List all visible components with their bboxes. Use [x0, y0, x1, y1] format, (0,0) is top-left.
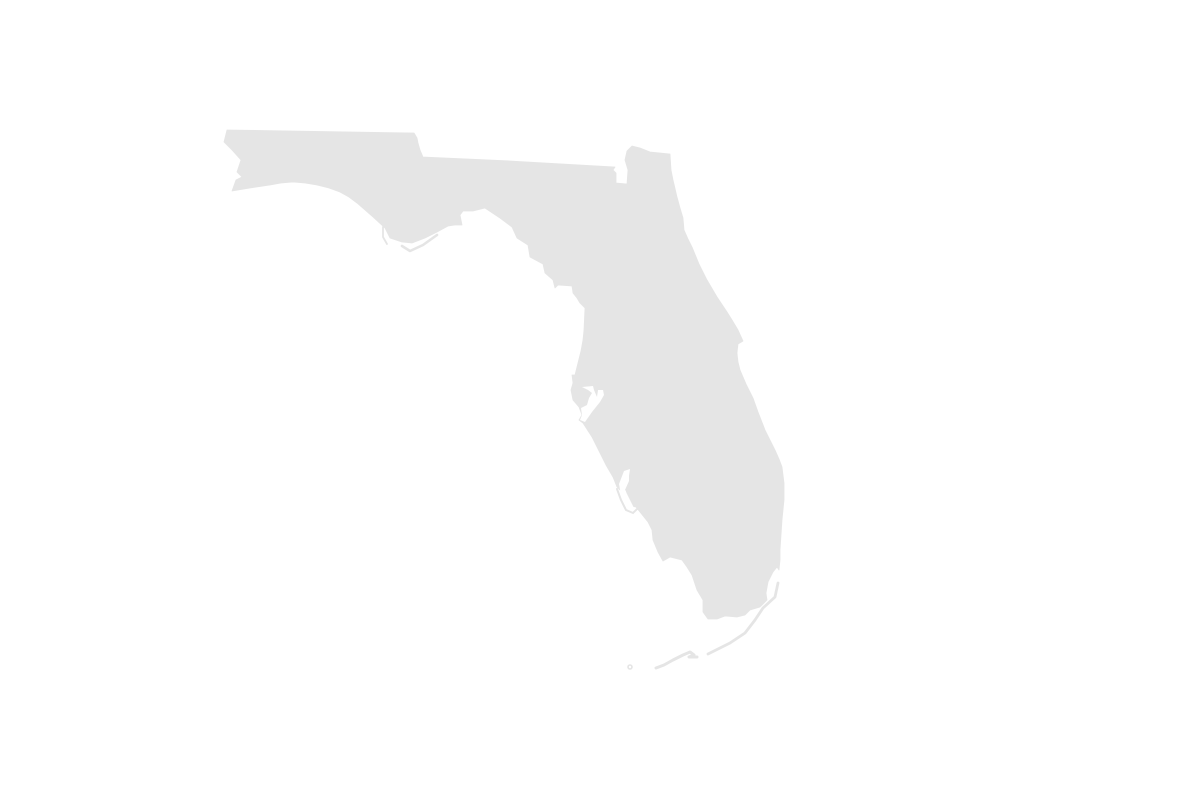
Tampa Bay: [580, 386, 604, 422]
barrier islands of the Panhandle: [383, 227, 437, 251]
mainland Florida: [224, 130, 784, 619]
Florida Keys: [628, 583, 778, 669]
Charlotte Harbor: [617, 469, 637, 513]
